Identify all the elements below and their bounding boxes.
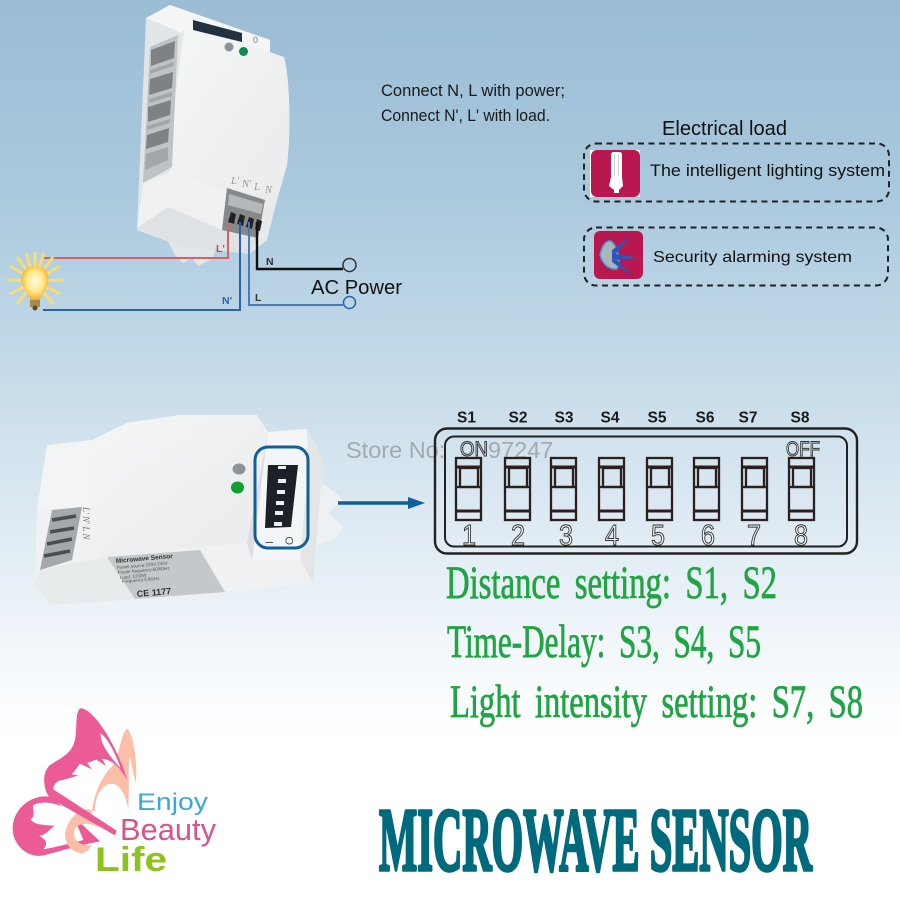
- switch numbers: 3: [559, 520, 573, 552]
- switch labels: S3: [555, 410, 574, 426]
- switch labels: S8: [791, 410, 810, 426]
- switch labels: S1: [457, 410, 476, 426]
- wiring diagram: [43, 222, 356, 310]
- icon: energy saving lamp: [590, 150, 640, 197]
- switch labels: S7: [739, 410, 757, 426]
- switch numbers: 5: [651, 520, 665, 552]
- switch numbers: [462, 520, 808, 552]
- on and off marks: ON: [460, 438, 488, 461]
- arrow: [338, 497, 425, 509]
- terminal letters: L': [230, 176, 240, 187]
- wire labels: L': [216, 243, 225, 255]
- left block: [37, 440, 92, 510]
- electrical load heading: Electrical load: [662, 118, 787, 140]
- instructions: Connect N, L with power;: [381, 82, 565, 100]
- wire labels: N': [222, 295, 232, 307]
- front cover: [77, 415, 268, 557]
- terminal block: [222, 188, 265, 238]
- setting notes: [446, 557, 863, 728]
- switch 3: [551, 458, 576, 520]
- wire L prime: [44, 223, 228, 258]
- switch 5: [647, 458, 672, 520]
- label text blocks: [145, 41, 175, 170]
- wire labels: N: [266, 256, 274, 268]
- icon: alarm siren: [594, 231, 643, 279]
- on and off marks: [460, 438, 820, 461]
- watermark: Store No:: [346, 437, 445, 463]
- mounting tab: [310, 483, 343, 550]
- terminal circle L: [344, 296, 356, 308]
- instructions: [381, 82, 565, 125]
- watermark: 97247: [488, 437, 553, 463]
- device photo: sensor top view: CE 1177: [136, 586, 172, 599]
- logo: enjoy beauty life butterfly: Beauty: [120, 812, 216, 847]
- status leds: [224, 42, 248, 56]
- terminal letters: [230, 176, 273, 196]
- mounting tab: [165, 236, 220, 266]
- wire L: [249, 222, 343, 305]
- switch labels: S2: [509, 410, 527, 426]
- wing slit: [101, 733, 121, 768]
- terminal letters: L' N' L N: [81, 506, 91, 540]
- terminal letters: N: [264, 185, 273, 196]
- ac power label: AC Power: [311, 276, 402, 299]
- panel: intelligent lighting: [584, 144, 889, 202]
- switch bay: [252, 429, 323, 560]
- switch numbers: 1: [462, 520, 476, 552]
- switch labels: S4: [601, 410, 620, 426]
- wire labels: [216, 243, 274, 307]
- switch numbers: 8: [794, 520, 808, 552]
- device photo: sensor top view: O: [284, 536, 296, 545]
- outer frame: [435, 428, 857, 554]
- dip switch diagram: [435, 410, 857, 554]
- terminal circle N: [343, 258, 356, 272]
- switch 2: [505, 458, 530, 520]
- alarm label: Security alarming system: [653, 249, 852, 266]
- status leds: [231, 464, 246, 494]
- switch labels: S5: [648, 410, 667, 426]
- lower wing: [13, 796, 100, 856]
- switch 4: [599, 458, 624, 520]
- device photo: sensor top view: [35, 415, 343, 605]
- device photo: sensor top view: Load: 1200W: [120, 573, 148, 580]
- terminal block: [40, 507, 82, 570]
- switch 6: [694, 458, 719, 520]
- device photo: sensor top view: Power frequency:50/60Hz: [118, 565, 170, 575]
- switch labels: [457, 410, 810, 426]
- highlight around dip switch: [255, 447, 308, 548]
- spec label: [107, 550, 225, 599]
- wire N: [257, 222, 343, 269]
- device photo: sensor top view: Microwave Sensor: [116, 553, 174, 565]
- upper wing: [44, 708, 127, 835]
- wire N prime: [43, 222, 240, 310]
- back plate and body silhouette: [137, 5, 289, 254]
- lower edge: [35, 557, 135, 605]
- o mark: 0: [253, 35, 258, 45]
- device photo: sensor top view: Frequency:5.8GHz: [122, 576, 160, 584]
- dip switch block: [265, 465, 298, 528]
- switch numbers: 2: [511, 520, 525, 552]
- wire labels: L: [255, 292, 262, 304]
- switch 7: [742, 458, 767, 520]
- body silhouette: [35, 415, 323, 605]
- specification label: [143, 35, 178, 183]
- device photo: din rail sensor: [137, 5, 289, 266]
- switch 1: [456, 458, 481, 520]
- switch numbers: 4: [605, 520, 619, 552]
- I and O marks: I: [264, 541, 276, 544]
- logo: enjoy beauty life butterfly: [13, 708, 216, 879]
- lighting label: The intelligent lighting system: [650, 162, 885, 180]
- switch labels: S6: [696, 410, 715, 426]
- switch numbers: 6: [701, 520, 715, 552]
- switch 8: [789, 458, 814, 520]
- terminal letters: N': [241, 179, 252, 190]
- logo: enjoy beauty life butterfly: Life: [95, 841, 167, 879]
- switch numbers: 7: [747, 520, 761, 552]
- peach wing: [65, 728, 136, 853]
- on and off marks: OFF: [786, 438, 820, 461]
- lower wing lobes: [31, 803, 83, 849]
- dip strip: [193, 20, 242, 42]
- wing scallops: [65, 757, 106, 779]
- terminal letters: L: [253, 182, 260, 193]
- icon: light bulb: [7, 252, 63, 310]
- logo words: Enjoy: [137, 789, 208, 816]
- panel: security alarm: [584, 228, 888, 286]
- device photo: sensor top view: Power source:220V-240V: [117, 561, 168, 570]
- instructions: Connect N', L' with load.: [381, 107, 550, 125]
